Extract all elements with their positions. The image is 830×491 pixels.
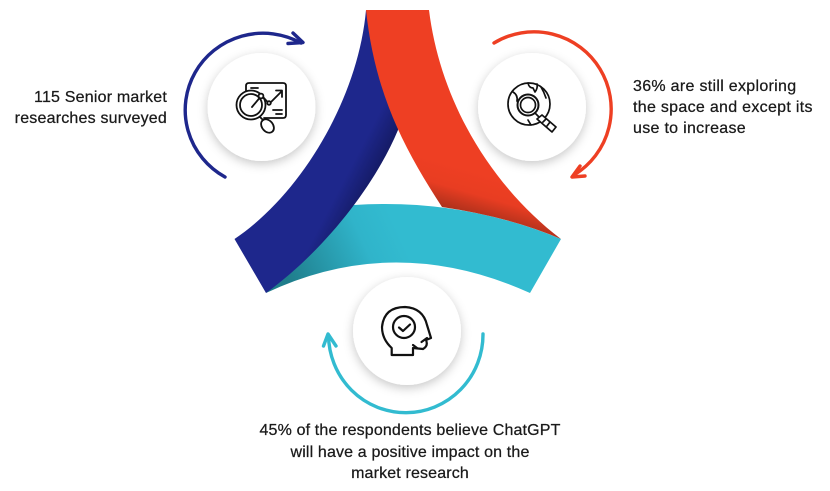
ribbon: teal [266, 204, 561, 293]
icon: globe with magnifier [508, 83, 556, 132]
icon: chart with magnifier [236, 83, 286, 135]
icon circle [478, 53, 586, 161]
text: positive impact: market research [351, 465, 469, 482]
text: exploring: use to increase [633, 120, 746, 137]
icon circle [353, 277, 461, 385]
panel: positive impact [260, 277, 561, 482]
text: surveyed: researches surveyed [15, 110, 167, 127]
ribbon: blue [234, 10, 410, 293]
icon: head with check [382, 307, 431, 355]
text: positive impact: 45% of the respondents believe ChatGPT [260, 422, 561, 439]
text: surveyed: 115 Senior market [34, 89, 167, 106]
ribbon: red [366, 10, 561, 239]
panel: surveyed [15, 33, 316, 177]
arc arrow: blue [185, 33, 303, 177]
text: exploring: 36% are still exploring [633, 78, 796, 95]
panel: exploring [478, 32, 813, 177]
icon circle [208, 53, 316, 161]
arc arrow: red [494, 32, 611, 177]
text: positive impact: will have a positive impact on the [290, 444, 530, 461]
triangular ribbon graphic [234, 10, 561, 293]
text: exploring: the space and except its [633, 99, 813, 116]
arc arrow: teal [324, 334, 483, 413]
